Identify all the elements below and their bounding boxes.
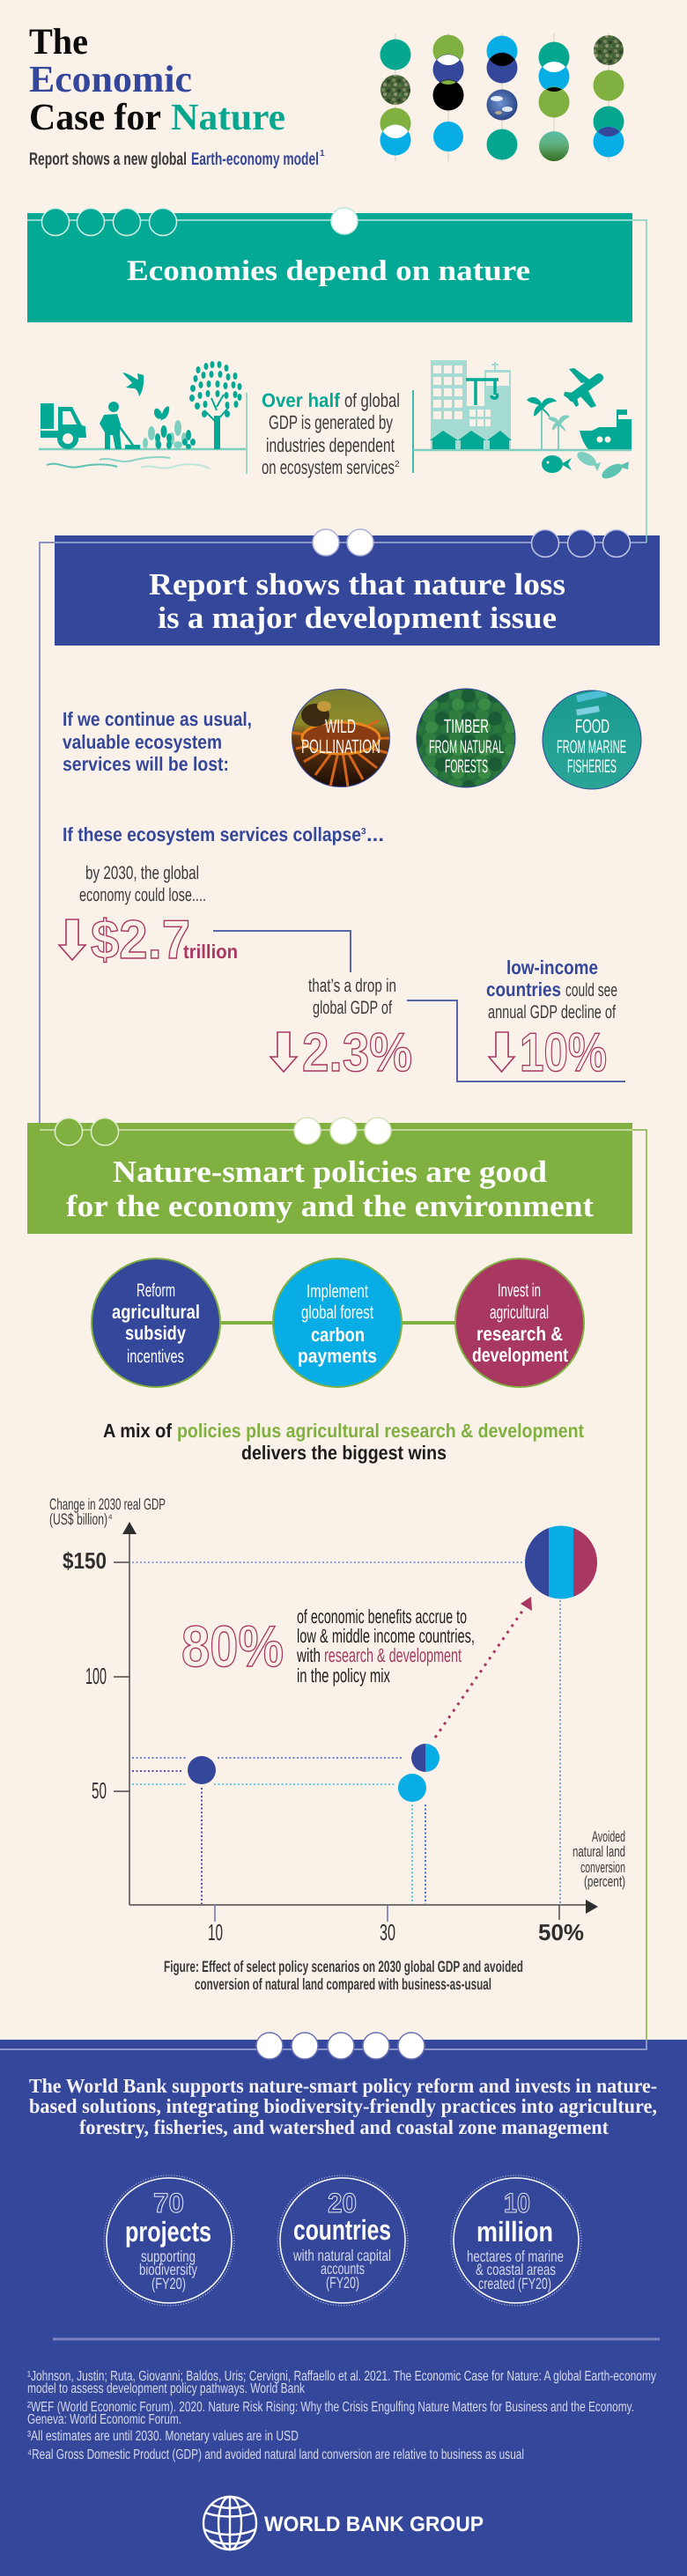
heading: a mix of policies	[103, 1420, 585, 1464]
callout: 80 percent: of economic benefits accrue to	[297, 1605, 467, 1628]
text block: over half of global GDP: industries dependent	[266, 434, 395, 456]
panel: world bank footer	[0, 2033, 687, 2576]
combo scenario circle	[411, 1744, 440, 1772]
arrow: dotted to peak	[435, 1597, 532, 1738]
x-axis title	[572, 1828, 625, 1890]
big combined scenario circle	[525, 1525, 597, 1599]
photo circle: food: FISHERIES	[567, 757, 617, 777]
circle: research and development: research &	[476, 1323, 563, 1345]
footnotes: ³All estimates are until 2030. Monetary values are in USD	[27, 2429, 299, 2444]
icon: down arrow	[270, 1032, 297, 1072]
circle: agricultural subsidy: agricultural	[112, 1301, 200, 1323]
text block: over half of global GDP: on ecosystem services	[262, 456, 395, 478]
stat: 2.3 percent	[270, 976, 412, 1083]
stat circle: 10 million: million	[476, 2216, 553, 2248]
heading: a mix of policies: policies plus agricultural research & development	[177, 1420, 585, 1442]
y-axis title: Change in 2030 real GDP	[49, 1495, 166, 1513]
carbon payment scenario circle	[398, 1774, 426, 1802]
x-axis labels: 10	[208, 1919, 223, 1945]
y-axis labels: 50	[92, 1777, 107, 1804]
x-axis labels	[208, 1919, 584, 1945]
circle: research and development	[455, 1258, 584, 1387]
y-axis title	[49, 1495, 166, 1528]
stat: 2.7 trillion	[59, 863, 238, 971]
icon: ship	[580, 410, 632, 449]
decorative circle columns	[380, 33, 624, 161]
stat: 2.3 percent: global GDP of	[313, 998, 392, 1018]
x-axis labels: 30	[380, 1919, 395, 1945]
connector: to drop in GDP	[213, 931, 351, 972]
circle: forest carbon payments: Implement	[307, 1281, 368, 1302]
y-axis labels: $150	[63, 1547, 107, 1574]
text block: world bank supports: The World Bank supports nature-smart policy reform and invests in nature-	[29, 2075, 657, 2097]
callout: 80 percent: 80%	[181, 1613, 284, 1679]
photo circle: timber	[417, 689, 515, 787]
circle: forest carbon payments	[273, 1258, 402, 1387]
photo circle: food: FROM MARINE	[557, 737, 626, 757]
stat circle: 10 million: created (FY20)	[478, 2275, 551, 2292]
photo circle: timber: FROM NATURAL	[429, 737, 504, 757]
callout: 80 percent	[181, 1605, 475, 1687]
icon: bird	[122, 373, 144, 396]
icon: airplane	[564, 368, 599, 408]
circle: agricultural subsidy	[92, 1258, 220, 1387]
connector: to low-income	[407, 1000, 625, 1081]
subtitle: Earth-economy model	[191, 150, 319, 169]
y-axis labels: 100	[85, 1663, 107, 1689]
icon: farmer with rake	[100, 402, 140, 449]
footnotes: ⁴Real Gross Domestic Product (GDP) and avoided natural land conversion are relative to business as usual	[27, 2447, 524, 2462]
connector line: green	[632, 1130, 646, 2040]
text block: if we continue as usual	[63, 708, 252, 775]
header circles	[256, 2033, 425, 2059]
callout: 80 percent: low & middle income countries,	[297, 1625, 475, 1647]
text block: over half of global GDP: 2	[395, 460, 400, 469]
photo circle: timber: FORESTS	[445, 757, 488, 777]
stat circle: 20 countries: countries	[293, 2214, 391, 2246]
stat: 10 percent: 10%	[520, 1022, 607, 1083]
panel: nature loss header	[55, 529, 660, 646]
stat circle: 10 million: & coastal areas	[476, 2261, 556, 2278]
stat: 10 percent	[486, 956, 617, 1083]
photo circle: wild pollination	[292, 689, 390, 787]
circle: research and development: agricultural	[490, 1303, 549, 1323]
circle: agricultural subsidy: incentives	[127, 1347, 184, 1367]
stat circle: 20 countries: accounts	[321, 2260, 365, 2277]
stat: 10 percent: could see	[565, 980, 617, 1000]
panel: nature-smart policies header	[27, 1118, 632, 1234]
text block: over half of global GDP: Over half	[262, 389, 341, 411]
illustration: land economy	[39, 361, 246, 469]
panel: nature-smart policies header: Nature-smart policies are good	[113, 1155, 548, 1189]
text block: if we continue as usual: valuable ecosystem	[63, 731, 222, 753]
stat: 10 percent: countries	[486, 978, 561, 1000]
policy circles	[92, 1258, 584, 1387]
circle: forest carbon payments: payments	[298, 1345, 377, 1367]
text block: world bank supports: forestry, fisheries, and watershed and coastal zone management	[79, 2116, 609, 2139]
stat circle: 10 million: 10	[504, 2188, 530, 2218]
icon: truck	[41, 403, 86, 449]
title: The	[29, 22, 88, 63]
subtitle: Report shows a new global	[29, 150, 187, 169]
stat circle: 70 projects: biodiversity	[139, 2261, 197, 2278]
text block: world bank supports: based solutions, integrating biodiversity-friendly practices into agriculture,	[29, 2095, 657, 2118]
panel: economies depend on nature header	[27, 208, 632, 322]
stat: 2.7 trillion: by 2030, the global	[85, 863, 199, 883]
footnotes	[27, 2369, 656, 2462]
icon: fish	[542, 449, 629, 482]
stat: 2.7 trillion: economy could lose....	[79, 885, 206, 905]
callout: 80 percent: research & development	[324, 1644, 462, 1666]
icon: city buildings	[430, 360, 512, 449]
stat: 2.3 percent: 2.3%	[302, 1022, 412, 1083]
panel: economies depend on nature header: Economies depend on nature	[127, 255, 530, 287]
photo circle: timber: TIMBER	[444, 715, 489, 737]
stat: 2.3 percent: that’s a drop in	[308, 976, 396, 996]
y-axis title: (US$ billion)	[49, 1510, 107, 1528]
photo circle: wild pollination: WILD	[325, 715, 356, 737]
callout: 80 percent: in the policy mix	[297, 1664, 390, 1687]
text block: world bank supports	[29, 2075, 657, 2139]
text block: if we continue as usual: services will be lost:	[63, 753, 229, 775]
figure caption	[164, 1958, 523, 1993]
icon: tree	[189, 361, 241, 449]
scatter chart	[49, 1495, 625, 1945]
icon: down arrow	[489, 1032, 514, 1072]
stat circle: 10 million: hectares of marine	[467, 2248, 564, 2265]
title	[29, 22, 285, 138]
icon: down arrow	[59, 919, 85, 960]
footnotes: Geneva: World Economic Forum.	[27, 2412, 181, 2427]
connector line: teal	[632, 220, 646, 543]
subtitle: 1	[320, 149, 325, 159]
stat circle: 20 countries: with natural capital	[292, 2247, 391, 2264]
stat circle: 70 projects: 70	[153, 2188, 184, 2218]
photo circle: wild pollination: POLLINATION	[301, 735, 380, 757]
stat: 10 percent: annual GDP decline of	[488, 1002, 616, 1022]
heading: if these ecosystem services collapse: If these ecosystem services collapse	[63, 823, 361, 845]
icon: butterfly	[154, 406, 169, 421]
text block: over half of global GDP: GDP is generated by	[269, 411, 393, 433]
title: Economic	[29, 59, 192, 100]
text block: over half of global GDP	[247, 389, 413, 478]
footnotes: model to assess development policy pathways. World Bank	[27, 2381, 306, 2396]
circle: research and development: Invest in	[498, 1281, 541, 1301]
y-axis title: 4	[108, 1513, 113, 1521]
dotted guide lines	[132, 1562, 560, 1904]
axes	[114, 1532, 588, 1922]
icon: palm trees	[527, 397, 570, 449]
stat: 2.7 trillion: trillion	[183, 941, 238, 963]
x-axis title: natural land	[572, 1843, 625, 1860]
stat circle: 70 projects: projects	[125, 2216, 211, 2248]
panel: nature loss header: Report shows that nature loss	[149, 567, 565, 602]
connector line: lavender	[40, 543, 55, 1130]
figure caption: conversion of natural land compared with business-as-usual	[195, 1975, 491, 1993]
icon: crop plants	[143, 420, 196, 449]
panel: nature-smart policies header: for the economy and the environment	[66, 1189, 594, 1223]
icon: waves	[47, 457, 210, 469]
circle: forest carbon payments: carbon	[311, 1324, 365, 1346]
x-axis title: conversion	[580, 1859, 625, 1876]
heading: if these ecosystem services collapse: 3	[361, 827, 366, 837]
photo circle: food: FOOD	[575, 715, 609, 737]
stat: 10 percent: low-income	[506, 956, 598, 978]
heading: a mix of policies: delivers the biggest wins	[241, 1442, 447, 1464]
circle: research and development: development	[472, 1344, 569, 1366]
photo circle: food	[543, 689, 641, 789]
stat circle: 20 countries: (FY20)	[326, 2274, 359, 2292]
stat circle: 10 million	[451, 2175, 581, 2306]
circle: forest carbon payments: global forest	[301, 1303, 373, 1323]
logo: world bank group	[203, 2497, 484, 2550]
title: Nature	[171, 97, 285, 138]
text block: over half of global GDP: of global	[344, 389, 400, 411]
circle: agricultural subsidy: subsidy	[125, 1322, 187, 1344]
circle: agricultural subsidy: Reform	[137, 1281, 175, 1301]
subsidy scenario circle	[188, 1756, 216, 1784]
y-axis labels	[63, 1547, 107, 1804]
x-axis title: Avoided	[592, 1828, 625, 1845]
panel: nature loss header: is a major development issue	[158, 601, 557, 635]
stat circle: 70 projects	[104, 2175, 234, 2306]
stat circle: 70 projects: supporting	[141, 2248, 196, 2265]
x-axis labels: 50%	[538, 1919, 584, 1945]
stat circle: 20 countries	[277, 2175, 408, 2306]
stat circle: 20 countries: 20	[328, 2188, 357, 2218]
heading: if these ecosystem services collapse: ...	[366, 823, 384, 845]
x-axis title: (percent)	[584, 1873, 625, 1890]
callout: 80 percent: with	[296, 1644, 321, 1666]
illustration: industries	[413, 360, 632, 482]
stat: 2.7 trillion: $2.7	[91, 910, 190, 971]
heading: a mix of policies: A mix of	[103, 1420, 173, 1442]
text block: if we continue as usual: If we continue as usual,	[63, 708, 252, 730]
stat circle: 70 projects: (FY20)	[151, 2275, 186, 2292]
logo: world bank group: WORLD BANK GROUP	[264, 2513, 484, 2536]
title: Case for	[29, 97, 161, 138]
